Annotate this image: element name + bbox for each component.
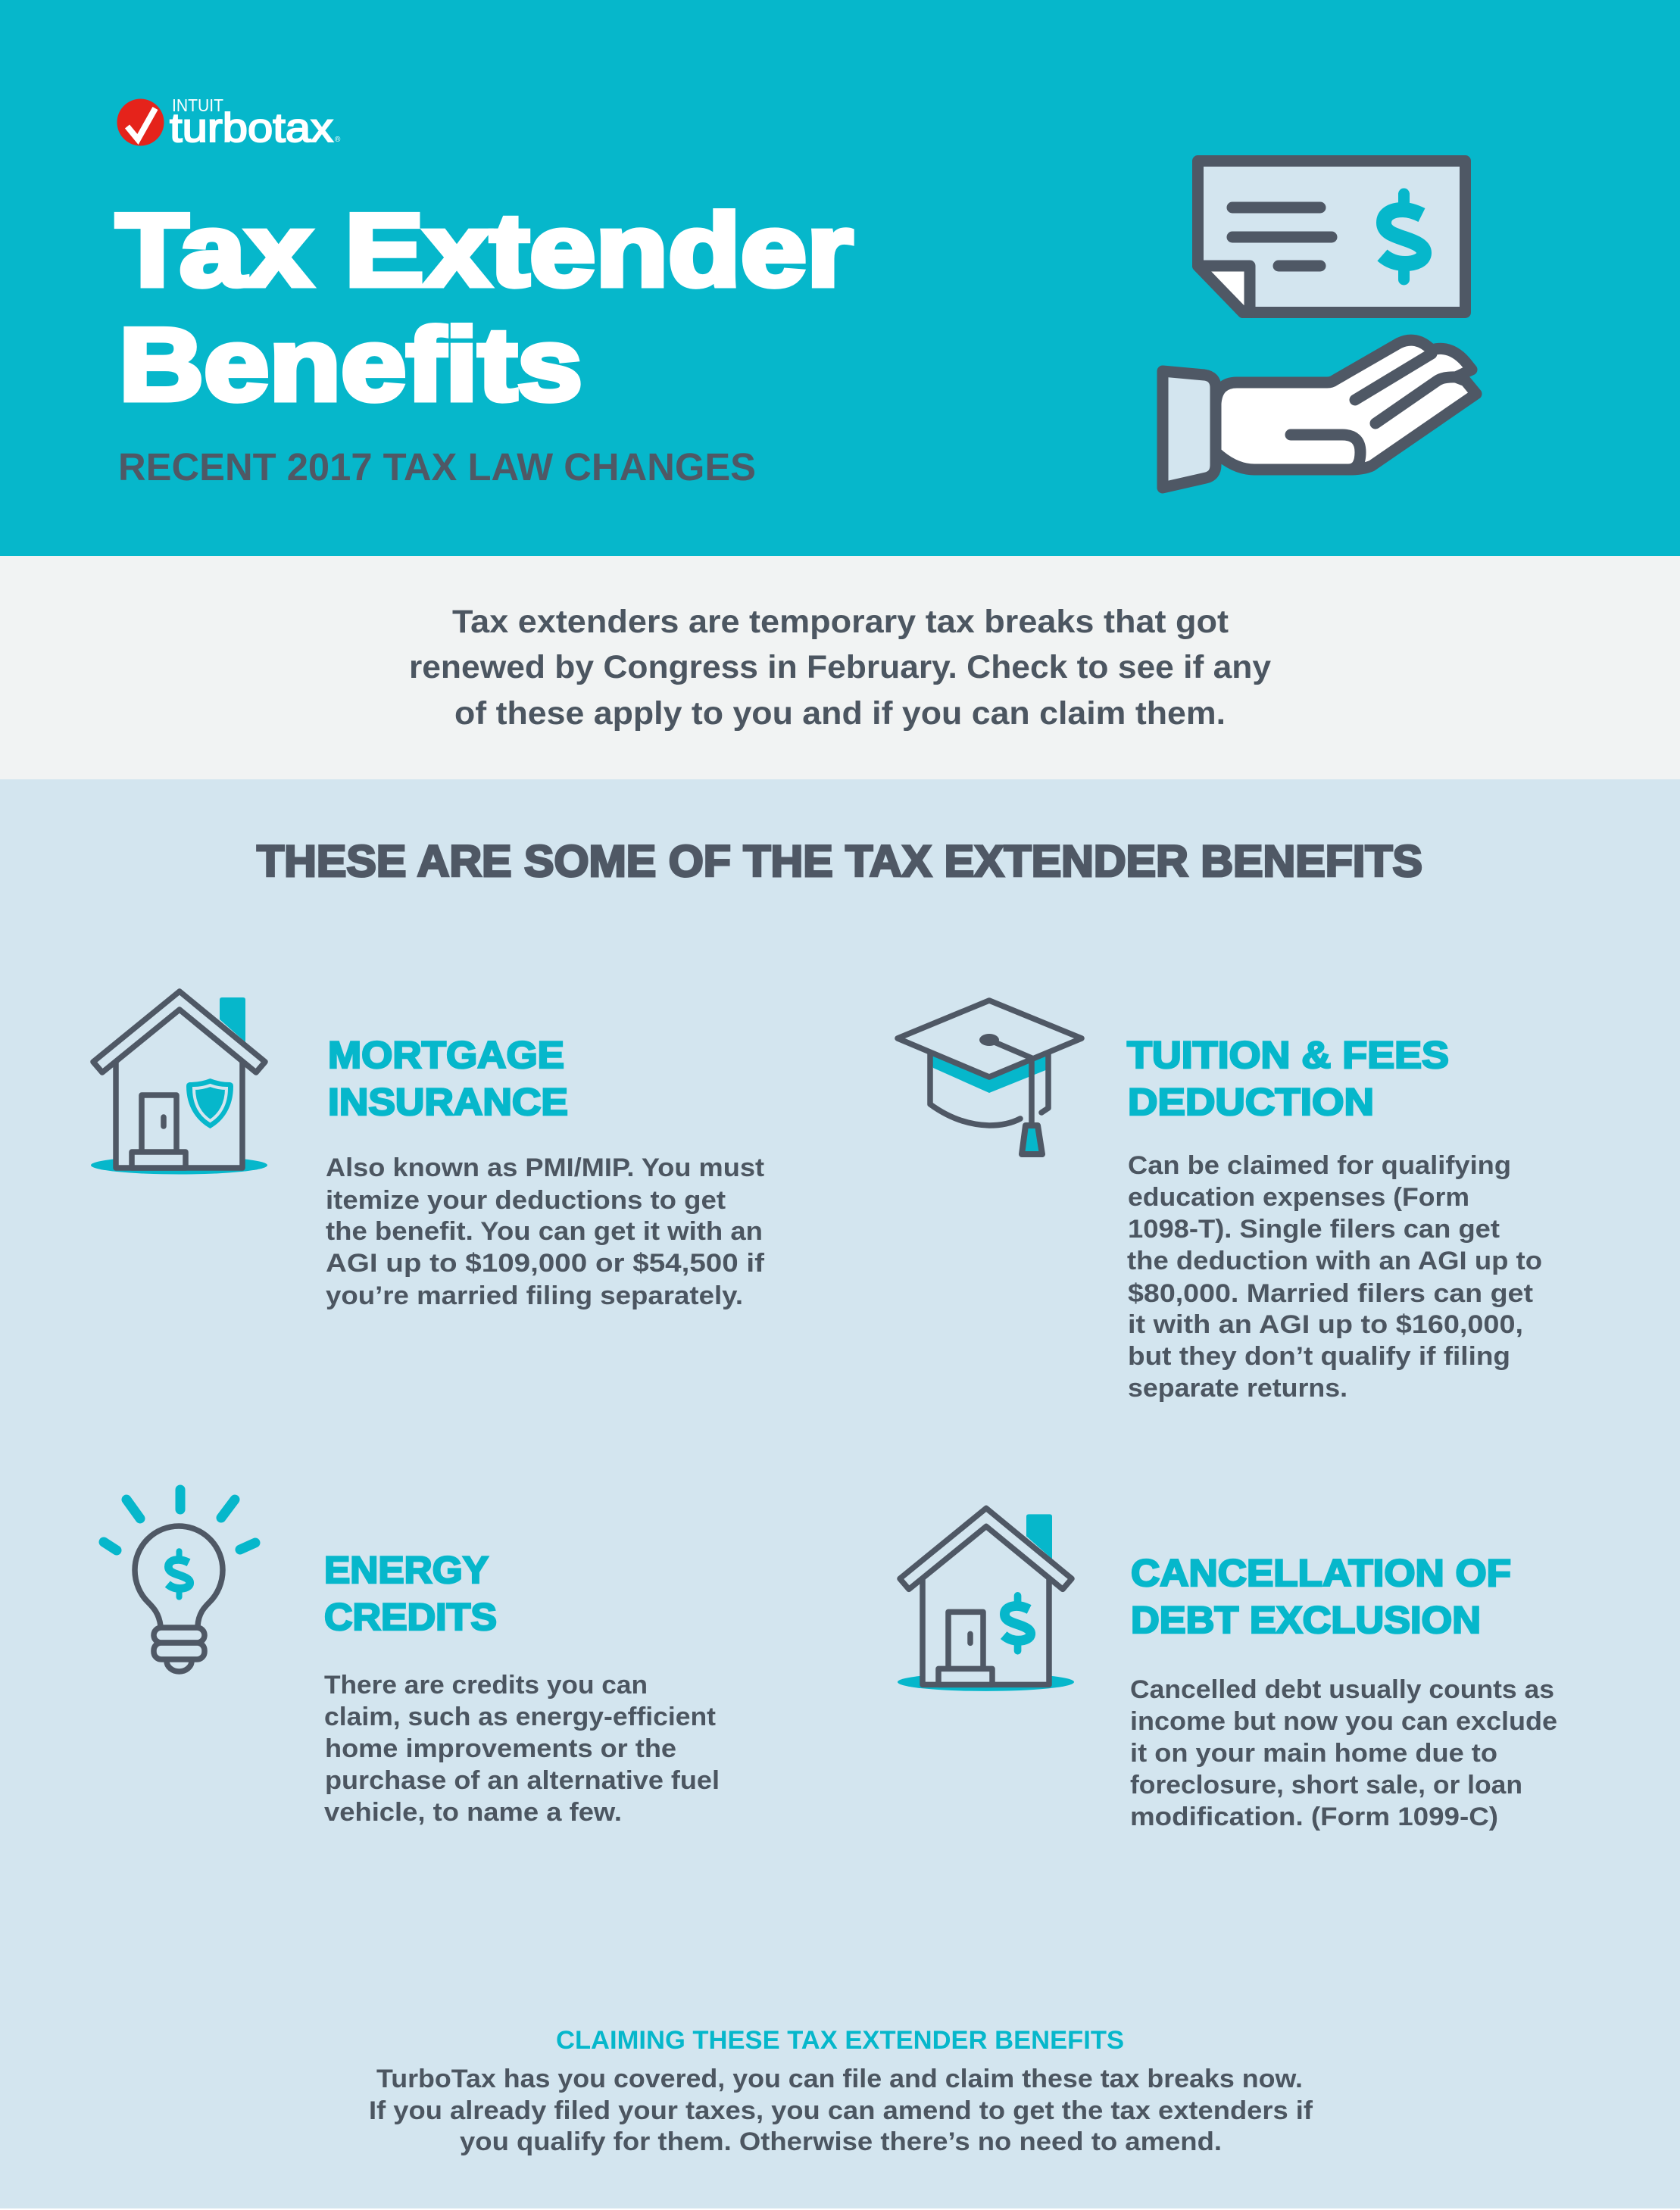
turbotax logo xyxy=(117,95,341,151)
header banner xyxy=(0,0,1680,556)
icon: open hand xyxy=(1163,340,1476,488)
body text: 1098-T). Single filers can get xyxy=(1128,1215,1500,1244)
closing body text: If you already filed your taxes, you can amend to get the tax extenders if xyxy=(369,2096,1313,2125)
body text: but they don’t qualify if filing xyxy=(1128,1342,1510,1371)
heading: DEDUCTION xyxy=(1128,1081,1374,1123)
body text: foreclosure, short sale, or loan xyxy=(1130,1771,1522,1800)
body text: Also known as PMI/MIP. You must xyxy=(326,1153,764,1182)
body text: it with an AGI up to $160,000, xyxy=(1128,1310,1523,1339)
subtitle: RECENT 2017 TAX LAW CHANGES xyxy=(118,445,756,489)
heading: CREDITS xyxy=(324,1596,497,1638)
icon: house with shield xyxy=(91,991,267,1174)
title: Tax Extender xyxy=(116,192,853,307)
closing body text: you qualify for them. Otherwise there’s no need to amend. xyxy=(460,2127,1222,2156)
body text: AGI up to $109,000 or $54,500 if xyxy=(326,1249,765,1278)
icon: cheque xyxy=(1198,161,1465,312)
body text: Can be claimed for qualifying xyxy=(1128,1151,1511,1180)
heading: CANCELLATION OF xyxy=(1131,1552,1511,1594)
icon: light bulb with dollar xyxy=(104,1490,255,1672)
benefits panel xyxy=(0,779,1680,2208)
body text: the benefit. You can get it with an xyxy=(326,1217,763,1246)
closing body text: TurboTax has you covered, you can file and claim these tax breaks now. xyxy=(376,2065,1303,2093)
panel: tuition and fees deduction xyxy=(898,1000,1542,1403)
heading: DEBT EXCLUSION xyxy=(1131,1599,1481,1641)
body text: education expenses (Form xyxy=(1128,1183,1469,1212)
turbotax logo: ® xyxy=(335,136,341,144)
body text: itemize your deductions to get xyxy=(326,1186,726,1215)
body text: Cancelled debt usually counts as xyxy=(1130,1675,1554,1704)
intro band xyxy=(0,556,1680,779)
turbotax logo: turbotax xyxy=(170,105,333,151)
heading xyxy=(324,1549,497,1638)
body text xyxy=(1130,1675,1557,1831)
body text: $80,000. Married filers can get xyxy=(1128,1279,1533,1308)
icon: graduation cap xyxy=(898,1000,1082,1154)
intro text: of these apply to you and if you can claim them. xyxy=(454,695,1226,732)
heading xyxy=(328,1034,568,1123)
panel: cancellation of debt exclusion xyxy=(898,1508,1557,1831)
body text xyxy=(326,1153,765,1310)
body text: home improvements or the xyxy=(325,1734,676,1763)
closing body text xyxy=(369,2065,1313,2156)
body text: vehicle, to name a few. xyxy=(324,1798,622,1827)
intro text: renewed by Congress in February. Check to see if any xyxy=(409,649,1271,685)
body text: the deduction with an AGI up to xyxy=(1127,1247,1542,1275)
intro text: Tax extenders are temporary tax breaks that got xyxy=(452,604,1229,640)
panel: mortgage insurance xyxy=(91,991,765,1310)
body text: you’re married filing separately. xyxy=(326,1281,743,1310)
body text: There are credits you can xyxy=(324,1671,648,1700)
heading: INSURANCE xyxy=(328,1081,568,1123)
heading: ENERGY xyxy=(324,1549,489,1591)
heading xyxy=(1127,1034,1449,1123)
body text: modification. (Form 1099-C) xyxy=(1130,1803,1498,1831)
closing heading: CLAIMING THESE TAX EXTENDER BENEFITS xyxy=(556,2026,1124,2055)
body text xyxy=(324,1671,720,1827)
body text: income but now you can exclude xyxy=(1130,1707,1557,1736)
closing note xyxy=(369,2026,1313,2156)
body text: it on your main home due to xyxy=(1130,1739,1497,1768)
body text xyxy=(1127,1151,1542,1403)
heading: TUITION & FEES xyxy=(1127,1034,1449,1076)
title xyxy=(116,192,853,422)
title: Benefits xyxy=(119,307,582,422)
panel: energy credits xyxy=(104,1490,720,1827)
heading: MORTGAGE xyxy=(328,1034,564,1076)
heading xyxy=(1131,1552,1511,1641)
section heading: THESE ARE SOME OF THE TAX EXTENDER BENEFITS xyxy=(257,837,1422,886)
body text: purchase of an alternative fuel xyxy=(325,1766,720,1795)
turbotax logo: INTUIT xyxy=(172,95,223,115)
intro text xyxy=(409,604,1271,732)
icon: house with dollar xyxy=(898,1508,1074,1691)
body text: claim, such as energy-efficient xyxy=(324,1703,716,1731)
body text: separate returns. xyxy=(1128,1374,1347,1403)
